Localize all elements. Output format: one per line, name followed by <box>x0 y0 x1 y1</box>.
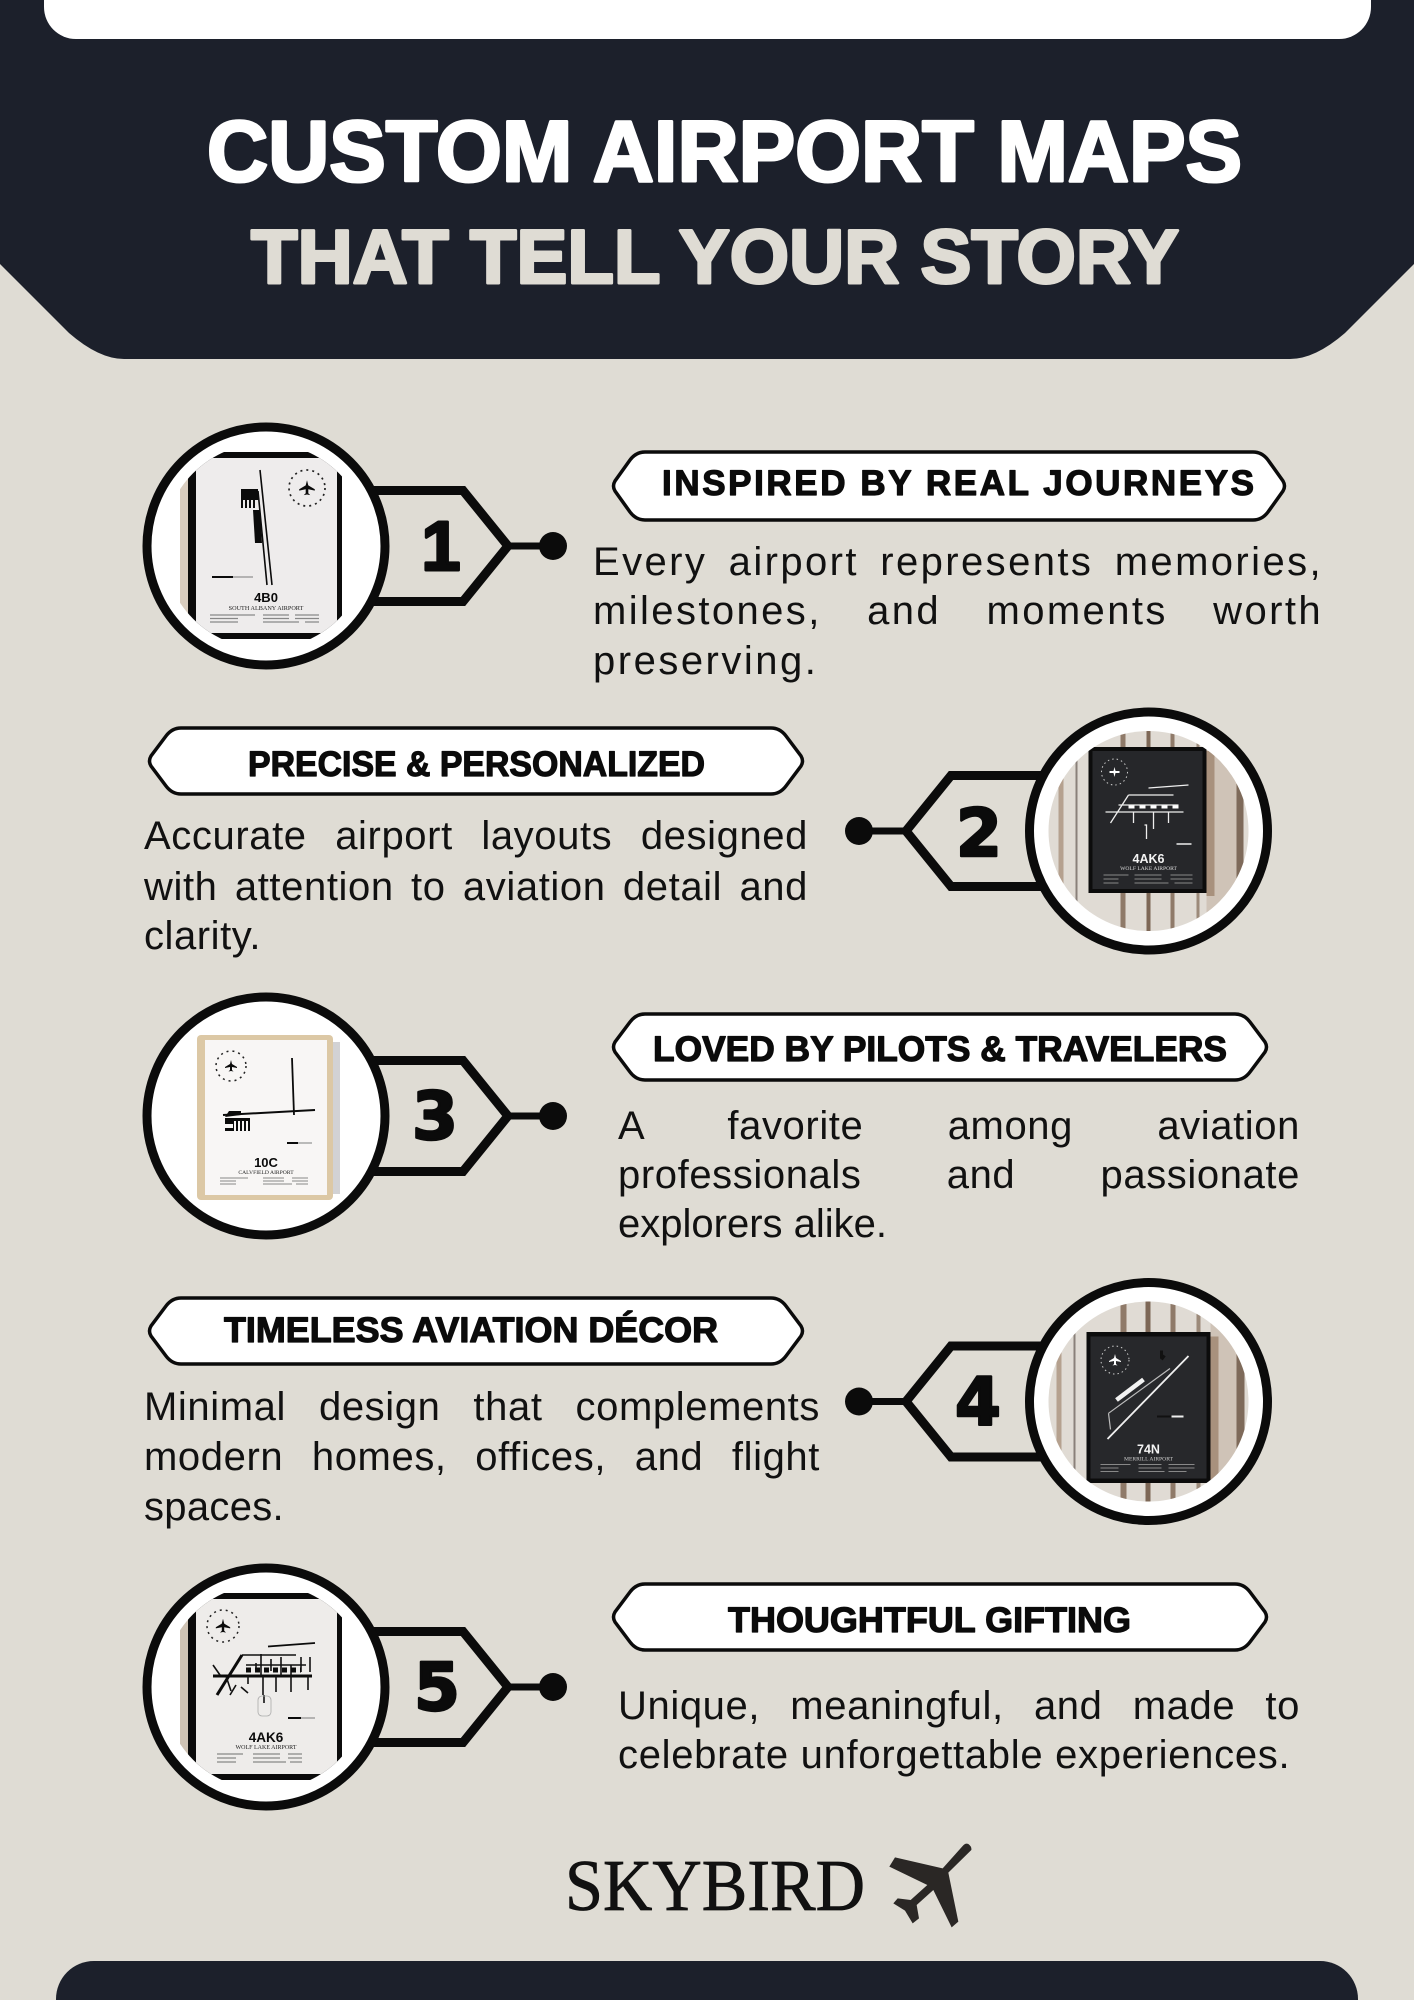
poster circle 2 <box>1030 712 1268 950</box>
text: item 4 description: Minimal design that complements <box>144 1385 820 1429</box>
banner 5 <box>614 1584 1266 1650</box>
text: item 2 description: clarity. <box>144 914 261 958</box>
poster circle 3 <box>147 997 385 1235</box>
text: item 1 description <box>593 540 1323 683</box>
panel: item 1 inspired by real journeys <box>142 422 1323 683</box>
poster circle 5 <box>147 1568 385 1806</box>
panel: item 4 timeless aviation decor <box>144 1278 1272 1529</box>
number tag 3 <box>366 1060 567 1172</box>
title line 1: CUSTOM AIRPORT MAPS <box>207 104 1242 200</box>
number tag 2: 2 <box>956 795 1002 872</box>
number tag 1: 1 <box>422 507 460 585</box>
banner 2: PRECISE & PERSONALIZED <box>248 745 705 784</box>
text: item 1 description: Every airport represents memories, <box>593 540 1323 584</box>
text: item 3 description: professionals and passionate <box>618 1153 1300 1197</box>
poster circle 5: WOLF LAKE AIRPORT <box>236 1745 297 1751</box>
text: item 4 description: spaces. <box>144 1485 284 1529</box>
text: item 3 description: A favorite among aviation <box>618 1104 1300 1148</box>
banner 3 <box>614 1014 1266 1080</box>
banner 1 <box>614 452 1284 520</box>
icon: plane <box>889 1844 971 1927</box>
text: item 1 description: milestones, and moments worth <box>593 589 1323 633</box>
text: item 2 description: with attention to aviation detail and <box>144 865 808 909</box>
number tag 1 <box>366 490 567 602</box>
poster circle 3: 10C <box>254 1155 279 1170</box>
poster circle 1: SOUTH ALBANY AIRPORT <box>229 605 304 612</box>
number tag 5 <box>366 1632 567 1742</box>
text: item 2 description <box>144 814 808 958</box>
text: item 3 description <box>618 1104 1300 1246</box>
number tag 4 <box>845 1346 1050 1457</box>
poster circle 5: 4AK6 <box>249 1730 284 1745</box>
banner 4: TIMELESS AVIATION DÉCOR <box>224 1310 718 1350</box>
text: item 3 description: explorers alike. <box>618 1202 887 1246</box>
poster circle 4: 74N <box>1137 1442 1160 1456</box>
number tag 3: 3 <box>412 1078 458 1155</box>
poster circle 4: MERRILL AIRPORT <box>1124 1456 1174 1462</box>
panel: item 3 loved by pilots and travelers <box>142 992 1300 1246</box>
top white bar <box>44 0 1371 39</box>
text: item 2 description: Accurate airport layouts designed <box>144 814 808 858</box>
banner 3: LOVED BY PILOTS & TRAVELERS <box>653 1030 1227 1069</box>
panel: item 5 thoughtful gifting <box>142 1564 1300 1810</box>
banner 2 <box>150 728 802 794</box>
bottom dark bar <box>56 1961 1358 2000</box>
header band <box>0 0 1414 359</box>
panel: item 2 precise and personalized <box>144 708 1272 958</box>
text: item 4 description: modern homes, offices, and flight <box>144 1435 820 1479</box>
number tag 5: 5 <box>414 1649 460 1726</box>
poster circle 1 <box>147 427 385 665</box>
poster circle 3: CALVFIELD AIRPORT <box>238 1170 294 1176</box>
text: item 5 description <box>618 1684 1300 1777</box>
text: item 1 description: preserving. <box>593 639 818 683</box>
text: item 4 description <box>144 1385 820 1529</box>
banner 5: THOUGHTFUL GIFTING <box>728 1601 1131 1640</box>
wordmark: SKYBIRD <box>565 1845 865 1926</box>
number tag 4: 4 <box>955 1364 1001 1441</box>
poster circle 4 <box>1030 1282 1268 1520</box>
logo: skybird wordmark with plane icon <box>565 1844 972 1928</box>
text: item 5 description: celebrate unforgettable experiences. <box>618 1733 1290 1777</box>
poster circle 1: 4B0 <box>254 590 278 605</box>
number tag 2 <box>845 776 1050 886</box>
text: item 5 description: Unique, meaningful, and made to <box>618 1684 1300 1728</box>
poster circle 2: WOLF LAKE AIRPORT <box>1120 866 1178 872</box>
banner 4 <box>150 1298 802 1364</box>
banner 1: INSPIRED BY REAL JOURNEYS <box>662 464 1254 503</box>
poster circle 2: 4AK6 <box>1133 852 1165 866</box>
title line 2: THAT TELL YOUR STORY <box>251 215 1179 300</box>
